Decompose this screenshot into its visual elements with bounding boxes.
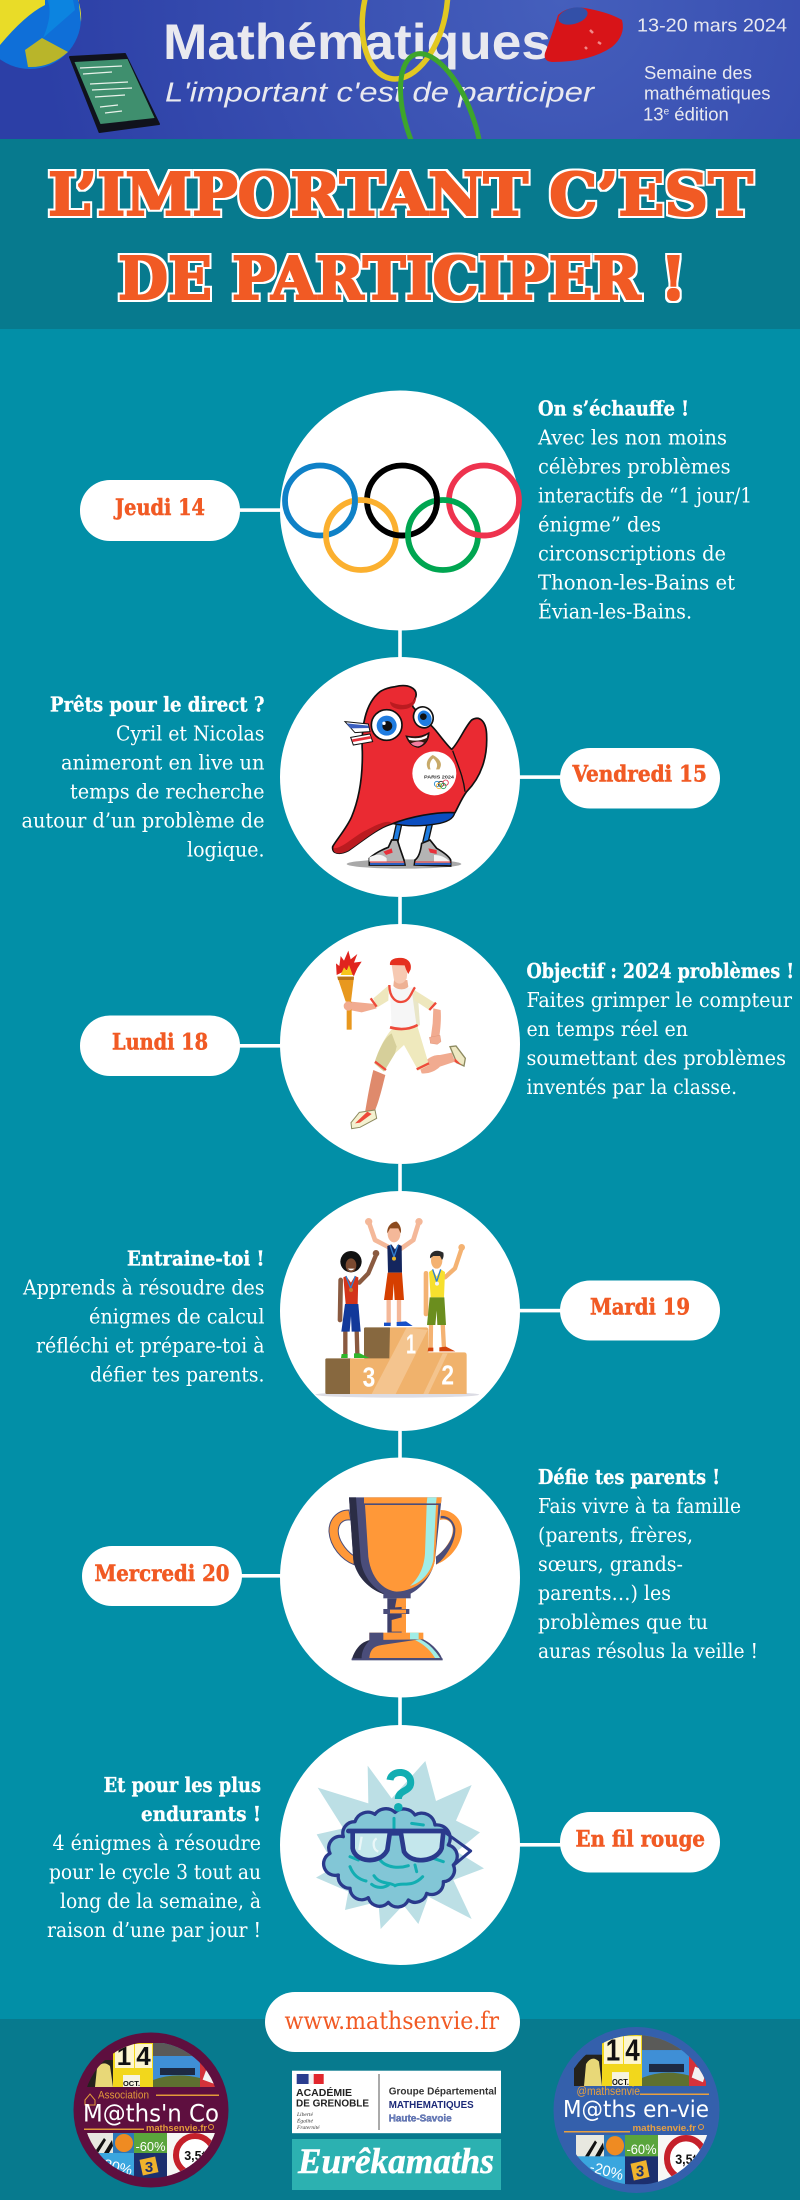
badge photos: 1	[606, 2034, 620, 2067]
text: Objectif 2024 problèmes: en temps réel en	[526, 1017, 688, 1041]
pill: Vendredi 15: Vendredi 15	[572, 762, 707, 788]
logo: Académie de Grenoble: MATHEMATIQUES	[389, 2100, 474, 2111]
pill: Mardi 19: Mardi 19	[590, 1294, 690, 1320]
badge photos: 4	[136, 2041, 151, 2071]
badge photos: -20%	[97, 2154, 134, 2178]
logo: Académie de Grenoble: Haute-Savoie	[389, 2114, 452, 2125]
text: On s'échauffe: Évian-les-Bains.	[538, 600, 692, 624]
text: On s'échauffe: interactifs de “1 jour/1	[538, 484, 752, 508]
text: On s'échauffe: Thonon-les-Bains et	[538, 570, 736, 594]
week label: édition	[669, 104, 729, 124]
panel: Mercredi 20	[82, 1458, 758, 1698]
badge photos: 3,5t	[675, 2151, 697, 2167]
badge: M@ths'n Co: mathsenvie.fr	[146, 2123, 208, 2133]
icon: yellow hoop	[359, 0, 450, 82]
badge photos	[574, 2034, 708, 2184]
header subtitle: L'important c'est de participer	[165, 76, 596, 108]
week label: Semaine des	[644, 62, 752, 83]
badge photos: 3,5t	[184, 2149, 207, 2163]
text: On s'échauffe: énigme” des	[538, 512, 661, 536]
badge: M@ths en-vie	[554, 2027, 720, 2193]
text: Prêts pour le direct: Prêts pour le direct ?	[50, 692, 264, 716]
text: Et pour les plus endurants: raison d’une par jour !	[47, 1918, 261, 1942]
header title: Mathématiques	[163, 14, 551, 70]
badge: M@ths'n Co	[74, 2032, 228, 2188]
pill: Vendredi 15	[560, 748, 720, 808]
icon: tablet	[70, 54, 159, 132]
panel: Lundi 18	[80, 924, 794, 1164]
logo: Académie de Grenoble: Groupe Départemental	[389, 2086, 497, 2097]
panel: En fil rouge	[47, 1725, 720, 1965]
circle: torch runner	[280, 924, 520, 1164]
badge photos: 4	[625, 2034, 640, 2067]
text: Entraine-toi: Apprends à résoudre des	[22, 1276, 265, 1300]
circle: olympic rings	[280, 390, 520, 630]
date: 13-20 mars 2024	[637, 14, 787, 36]
icon: red cone	[545, 4, 623, 62]
text: Prêts pour le direct: animeront en live un	[61, 750, 265, 774]
icon: green hoop	[398, 51, 482, 139]
text: Objectif 2024 problèmes: inventés par la classe.	[526, 1075, 737, 1099]
text: Entraine-toi: Entraine-toi !	[127, 1246, 264, 1270]
badge photos: OCT.	[123, 2079, 140, 2088]
badge photos: 3	[636, 2163, 645, 2181]
text: Prêts pour le direct: autour d’un problème de	[22, 808, 264, 832]
text: Et pour les plus endurants: long de la semaine, à	[60, 1889, 261, 1913]
text: Entraine-toi	[22, 1246, 265, 1386]
circle: podium	[280, 1191, 520, 1431]
pill: Mercredi 20: Mercredi 20	[94, 1561, 230, 1587]
text: On s'échauffe: circonscriptions de	[538, 542, 726, 566]
badge photos: -20%	[588, 2159, 625, 2184]
logo: Académie de Grenoble: DE GRENOBLE	[296, 2099, 369, 2110]
text: Prêts pour le direct: Cyril et Nicolas	[116, 722, 264, 746]
text: Défie tes parents: auras résolus la veille !	[538, 1639, 758, 1663]
text: Et pour les plus endurants: endurants !	[141, 1802, 261, 1826]
text: Défie tes parents: sœurs, grands-	[538, 1552, 683, 1576]
header banner	[0, 0, 800, 139]
text: Entraine-toi: énigmes de calcul	[89, 1304, 265, 1328]
pill: Mercredi 20	[82, 1546, 242, 1606]
text: Défie tes parents: (parents, frères,	[538, 1523, 693, 1547]
badge photos: 1	[117, 2041, 131, 2071]
circle: mascot	[280, 657, 520, 897]
badge photos: 3	[145, 2159, 153, 2176]
text: Défie tes parents: Défie tes parents !	[538, 1465, 720, 1489]
circle: trophy	[280, 1458, 520, 1698]
pill: En fil rouge: En fil rouge	[576, 1826, 705, 1852]
logo: Académie de Grenoble	[292, 2071, 501, 2133]
house icon	[85, 2094, 95, 2105]
pill: website url	[265, 1992, 520, 2052]
text: Et pour les plus endurants: pour le cycle 3 tout au	[49, 1860, 261, 1884]
text: Et pour les plus endurants: 4 énigmes à résoudre	[52, 1831, 261, 1855]
text: Et pour les plus endurants	[47, 1773, 261, 1942]
text: On s'échauffe: Avec les non moins	[537, 426, 727, 450]
badge photos	[85, 2041, 217, 2179]
pill: website url: www.mathsenvie.fr	[284, 2007, 500, 2035]
badge photos: -60%	[626, 2142, 657, 2157]
text: Prêts pour le direct	[22, 692, 265, 862]
badge: M@ths'n Co: Association	[98, 2090, 149, 2102]
badge: M@ths en-vie: @mathsenvie	[576, 2086, 640, 2098]
text: Entraine-toi: réfléchi et prépare-toi à	[36, 1334, 265, 1358]
title line 2: DE PARTICIPER !	[118, 244, 686, 313]
badge photos: -60%	[136, 2139, 166, 2154]
badge: M@ths'n Co: M@ths'n Co	[83, 2100, 219, 2128]
title band	[0, 139, 800, 329]
text: Défie tes parents	[538, 1465, 758, 1663]
pill: Mardi 19	[560, 1280, 720, 1340]
circle: podium: 1	[406, 1328, 416, 1359]
circle: mascot: PARIS 2024	[424, 775, 455, 780]
text: On s'échauffe: On s’échauffe !	[538, 396, 689, 420]
pill: Lundi 18: Lundi 18	[112, 1030, 208, 1056]
text: On s'échauffe	[537, 396, 752, 624]
text: Prêts pour le direct: logique.	[187, 838, 264, 862]
circle: podium: 3	[363, 1362, 375, 1393]
text: Entraine-toi: défier tes parents.	[90, 1362, 264, 1386]
logo: Académie de Grenoble: ACADÉMIE	[296, 2086, 352, 2099]
panel: Jeudi 14	[80, 390, 752, 630]
text: Objectif 2024 problèmes: Faites grimper le compteur	[526, 988, 792, 1012]
pill: En fil rouge	[560, 1812, 720, 1872]
text: Objectif 2024 problèmes	[526, 959, 794, 1099]
footer band	[0, 2019, 800, 2200]
icon: volleyball	[0, 0, 81, 69]
badge photos: OCT.	[612, 2077, 629, 2087]
text: Défie tes parents: parents…) les	[538, 1581, 671, 1605]
pill: Lundi 18	[80, 1016, 240, 1076]
week label: mathématiques	[644, 82, 770, 104]
panel: Vendredi 15	[22, 657, 720, 897]
logo: Académie de Grenoble: Liberté	[296, 2112, 313, 2118]
circle: brain with glasses	[280, 1725, 520, 1965]
logo: Académie de Grenoble: Fraternité	[296, 2125, 320, 2131]
pill: Jeudi 14: Jeudi 14	[113, 495, 205, 521]
text: Prêts pour le direct: temps de recherche	[70, 780, 264, 804]
circle: podium: 2	[441, 1359, 454, 1390]
week label: e	[664, 106, 670, 118]
text: Défie tes parents: problèmes que tu	[538, 1610, 708, 1634]
text: Défie tes parents: Fais vivre à ta famille	[538, 1494, 741, 1518]
pill: Jeudi 14	[80, 480, 240, 541]
logo: Académie de Grenoble: Égalité	[296, 2116, 313, 2124]
text: Et pour les plus endurants: Et pour les plus	[104, 1773, 261, 1797]
panel: Mardi 19	[22, 1191, 720, 1431]
text: On s'échauffe: célèbres problèmes	[538, 454, 731, 478]
title line 1: L’IMPORTANT C’EST	[48, 160, 753, 229]
week label: 13	[643, 104, 729, 124]
badge: M@ths en-vie: mathsenvie.fr	[632, 2123, 696, 2134]
logo: Eurêkamaths: Eurêkamaths	[297, 2141, 494, 2181]
text: Objectif 2024 problèmes: soumettant des problèmes	[526, 1046, 786, 1070]
badge: M@ths en-vie: M@ths en-vie	[563, 2097, 709, 2123]
